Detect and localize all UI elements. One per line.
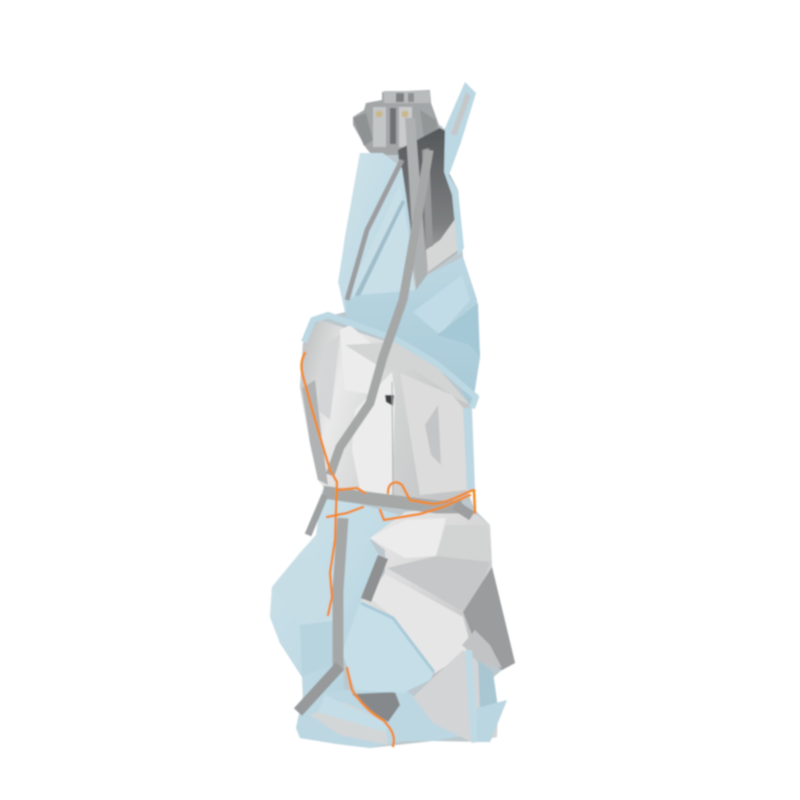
upper section: light blue fabric, left (338, 153, 415, 330)
lower section: blue panel, centre (342, 602, 434, 693)
silhouette: base shape of the whole bundle (270, 125, 515, 748)
middle section: silver fabric (300, 320, 475, 510)
flap: blue fabric with silver lining, top right (444, 82, 476, 256)
bottom section: hem folds and base (296, 690, 470, 748)
hood hem: blue band over silver (304, 315, 476, 408)
cords: orange drawstrings (302, 353, 475, 746)
lower section: silver panel and blue stripe, bottom right (413, 650, 507, 743)
interior: dark frame and silver lining (398, 118, 463, 290)
hub: grey frame mechanism (353, 90, 441, 155)
lower section: blue fabric, left (270, 490, 400, 700)
upper section: blue hood, right (345, 257, 480, 408)
lower section: silver fabric, right (360, 505, 515, 680)
straps: grey webbing (298, 150, 472, 712)
